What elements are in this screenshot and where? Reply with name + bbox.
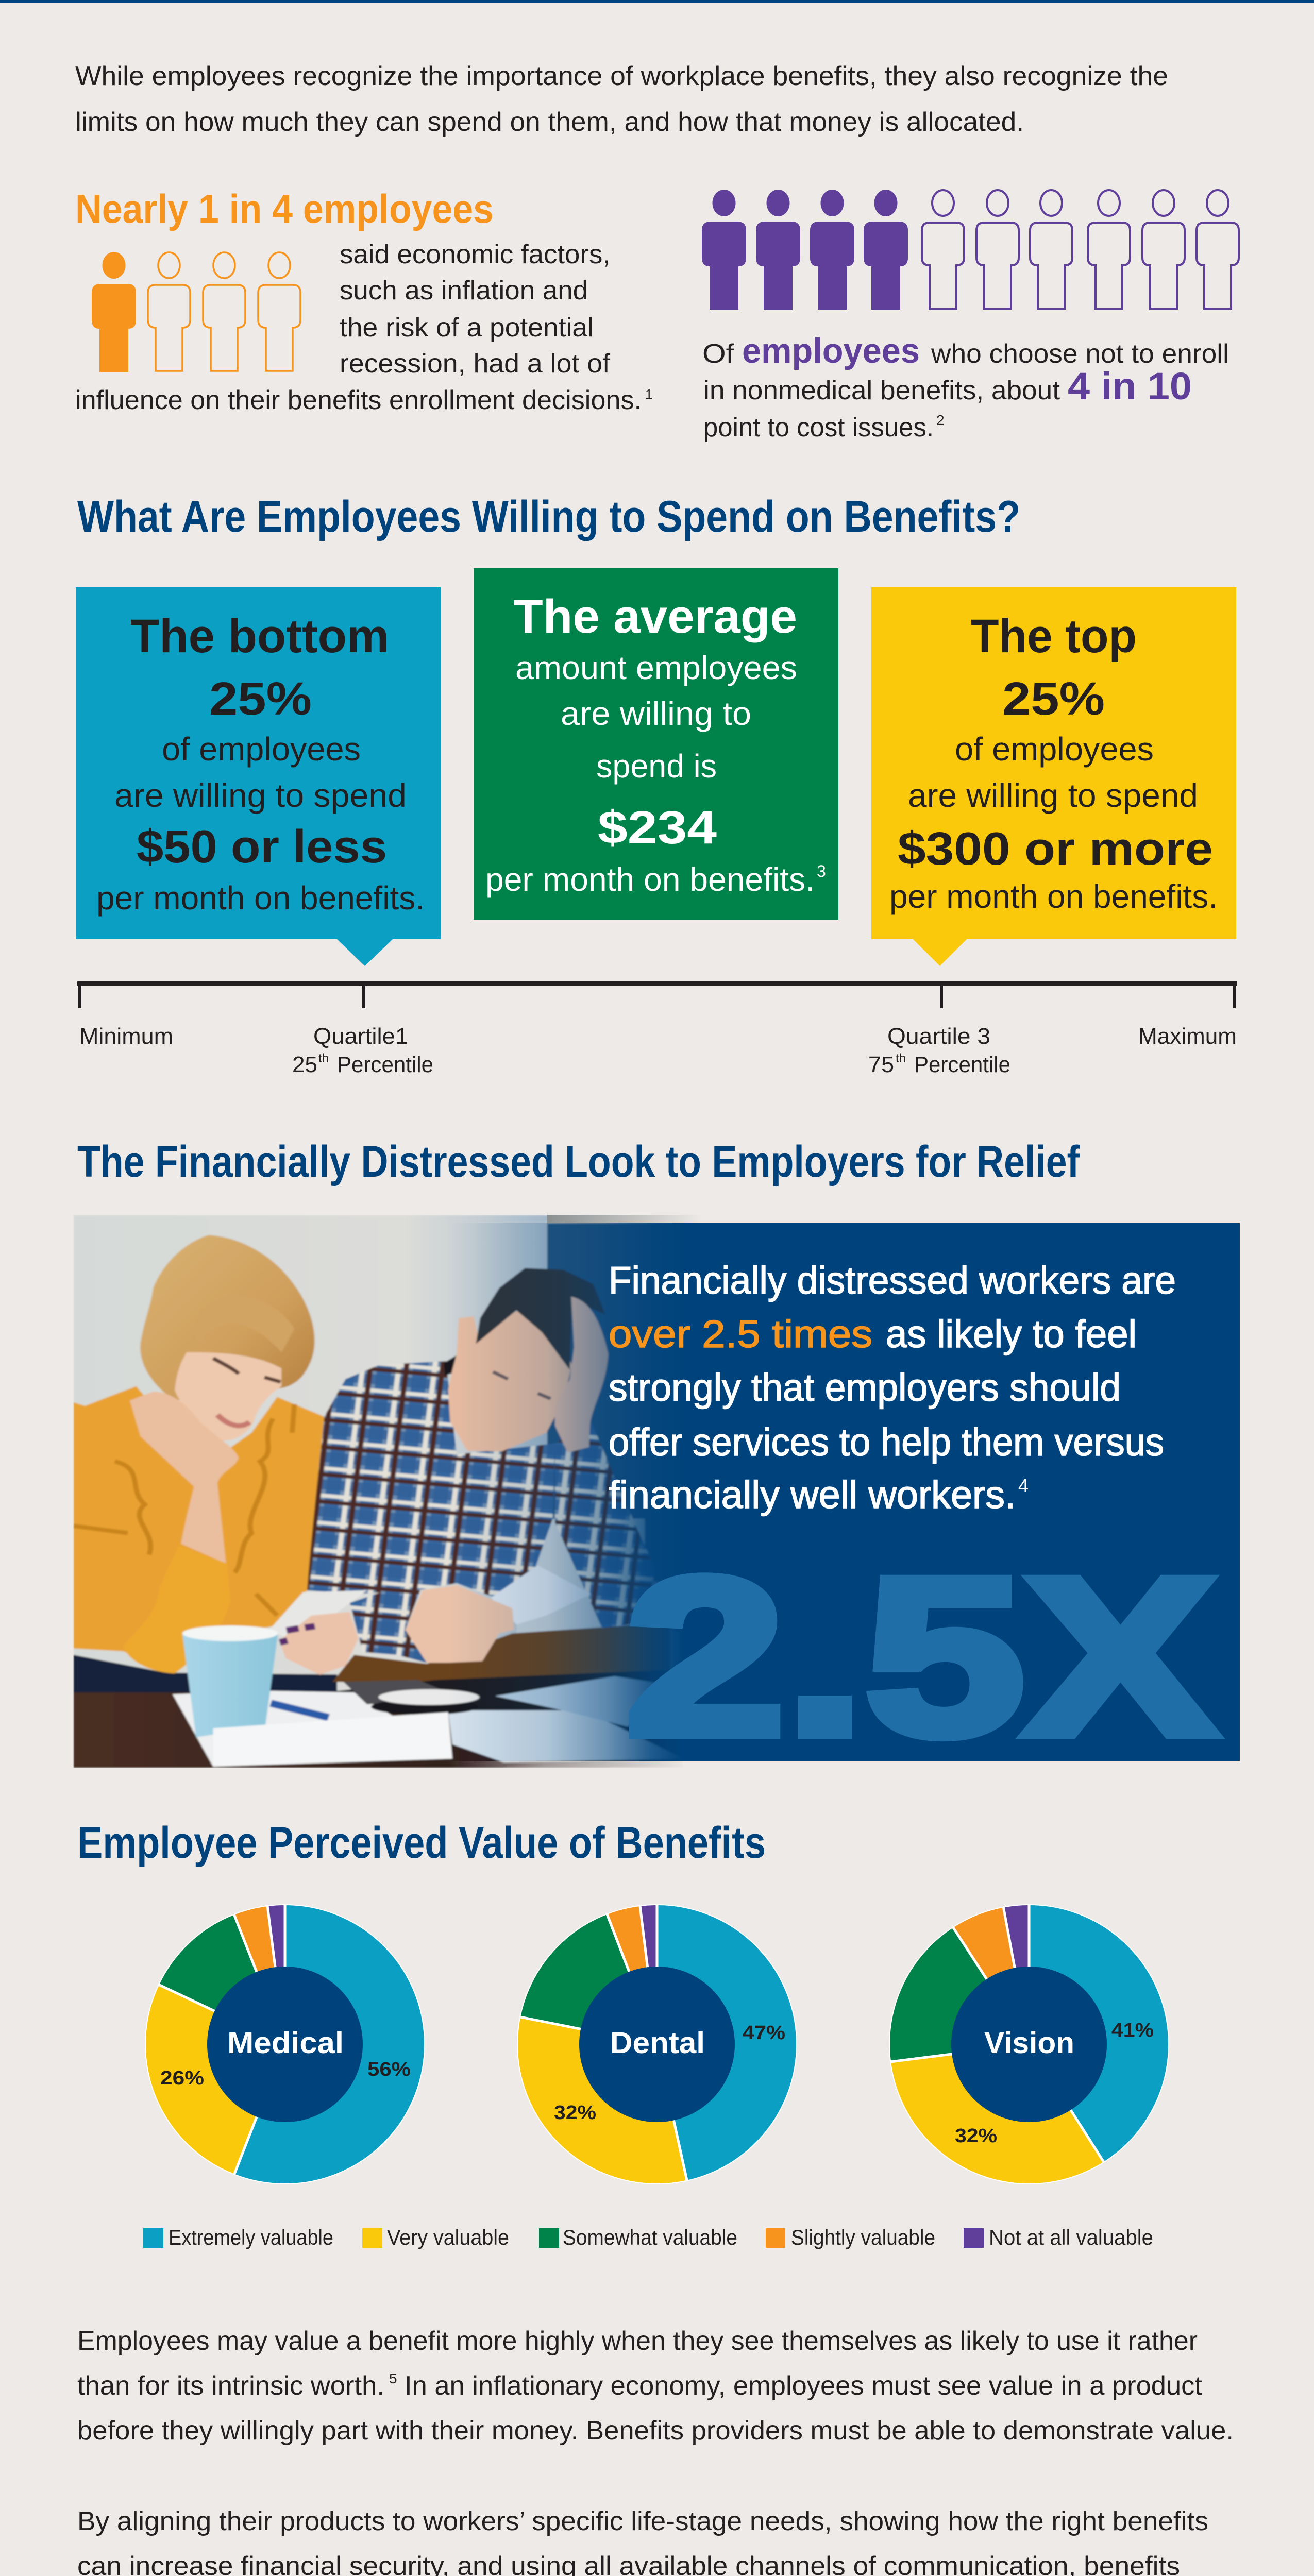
legend: Not at all valuable — [989, 2225, 1153, 2249]
heading: financially distressed: The Financially Distressed Look to Employers for Relief — [77, 1137, 1080, 1187]
intro text: limits on how much they can spend on them, and how that money is allocated. — [75, 107, 1024, 137]
text: financially distressed workers: strongly that employers should — [609, 1366, 1121, 1409]
callout: bottom 25%: of employees — [162, 731, 361, 768]
callout: average $234: $234 — [598, 802, 717, 854]
timeline axis with quartile labels: Minimum — [79, 1024, 173, 1049]
callout: top 25%: The top — [971, 610, 1137, 663]
panel: photo with stat — [73, 1215, 1240, 1782]
text: value paragraph: than for its intrinsic worth. — [77, 2371, 384, 2401]
text: economic factors: recession, had a lot of — [340, 349, 611, 379]
callout: top 25%: are willing to spend — [908, 777, 1198, 814]
legend: Extremely valuable — [169, 2225, 333, 2249]
text: closing paragraph: By aligning their products to workers’ specific life-stage needs, showing how the right benefits — [77, 2506, 1208, 2536]
timeline axis with quartile labels: Quartile1 — [313, 1024, 408, 1049]
callout: top 25%: of employees — [955, 731, 1154, 768]
chart: dental donut — [517, 1904, 797, 2184]
text: cost issues: in nonmedical benefits, about — [703, 376, 1060, 405]
legend: Slightly valuable — [791, 2225, 935, 2249]
timeline axis with quartile labels: Quartile 3 — [887, 1024, 990, 1049]
text: financially distressed workers: financially well workers. — [609, 1473, 1016, 1516]
icon: ten people, four filled — [702, 190, 1239, 310]
intro text — [75, 61, 1168, 137]
heading: nearly 1 in 4: Nearly 1 in 4 employees — [75, 186, 494, 231]
timeline axis with quartile labels: 25 — [292, 1052, 317, 1077]
callout: top 25%: per month on benefits. — [889, 878, 1218, 915]
heading: willing to spend: What Are Employees Willing to Spend on Benefits? — [77, 492, 1020, 541]
text: financially distressed workers: 4 — [1018, 1475, 1029, 1496]
text: cost issues: Of — [702, 339, 735, 369]
callout: top 25% — [871, 587, 1236, 966]
text: economic factors: said economic factors, — [340, 240, 610, 269]
legend: Somewhat valuable — [563, 2225, 737, 2249]
top bar — [0, 0, 1314, 3]
overlay: navy panel and gradient fades — [448, 1215, 1240, 1769]
stat: 2.5X watermark: 2.5X — [626, 1532, 1218, 1782]
text: economic factors — [75, 240, 652, 415]
text: cost issues: point to cost issues. — [703, 413, 934, 443]
text: financially distressed workers: offer services to help them versus — [609, 1420, 1164, 1464]
text: economic factors: such as inflation and — [340, 276, 588, 306]
timeline axis with quartile labels — [77, 982, 1237, 1077]
text: value paragraph — [77, 2326, 1234, 2446]
text: value paragraph: 5 — [389, 2370, 397, 2386]
chart: dental donut: Dental — [610, 2026, 705, 2060]
panel: 4 in 10 employees — [702, 190, 1239, 443]
text: economic factors: the risk of a potential — [340, 313, 594, 343]
callout: average $234: are willing to — [561, 695, 751, 732]
callout: average $234: The average — [513, 590, 797, 643]
chart: dental donut: 32% — [554, 2102, 596, 2124]
text: economic factors: 1 — [645, 386, 652, 402]
timeline axis with quartile labels: 75 — [868, 1052, 894, 1077]
callout: bottom 25% — [76, 587, 441, 966]
text: cost issues: who choose not to enroll — [931, 339, 1229, 369]
text: cost issues — [702, 331, 1229, 443]
text: value paragraph: In an inflationary economy, employees must see value in a product — [405, 2371, 1203, 2401]
intro text: While employees recognize the importance of workplace benefits, they also recognize the — [75, 61, 1168, 91]
callout: top 25%: 25% — [1002, 673, 1105, 725]
callout: average $234: 3 — [817, 862, 826, 880]
chart: medical donut — [145, 1904, 425, 2184]
callout: top 25%: $300 or more — [898, 823, 1213, 875]
callout: average $234: per month on benefits. — [485, 861, 815, 898]
text: financially distressed workers: Financially distressed workers are — [609, 1259, 1176, 1302]
chart: vision donut — [889, 1904, 1169, 2184]
text: financially distressed workers: as likely to feel — [886, 1312, 1137, 1355]
text: economic factors: influence on their benefits enrollment decisions. — [75, 385, 642, 415]
chart: dental donut: 47% — [743, 2022, 785, 2044]
chart: vision donut: 41% — [1111, 2020, 1154, 2041]
callout: bottom 25%: per month on benefits. — [96, 879, 425, 917]
timeline axis with quartile labels: Maximum — [1138, 1024, 1237, 1049]
chart: medical donut: 56% — [367, 2059, 411, 2080]
heading: perceived value: Employee Perceived Value of Benefits — [77, 1818, 766, 1868]
text: financially distressed workers: over 2.5 times — [609, 1312, 872, 1355]
text: cost issues: 4 in 10 — [1068, 365, 1192, 408]
callout: average $234 — [474, 568, 838, 920]
callout: average $234: amount employees — [515, 649, 797, 686]
timeline axis with quartile labels: Percentile — [914, 1052, 1010, 1077]
icon: four people, one filled — [92, 252, 300, 372]
legend: Very valuable — [387, 2225, 509, 2249]
text: value paragraph: before they willingly part with their money. Benefits providers must be able to demonstrate value. — [77, 2416, 1234, 2446]
panel: nearly 1 in 4 employees — [75, 186, 652, 415]
chart: medical donut: Medical — [227, 2026, 344, 2060]
callout: bottom 25%: are willing to spend — [114, 777, 407, 814]
text: value paragraph: Employees may value a benefit more highly when they see themselves as likely to use it rather — [77, 2326, 1198, 2356]
text: cost issues: 2 — [936, 412, 945, 428]
chart: vision donut: Vision — [984, 2026, 1074, 2060]
timeline axis with quartile labels: th — [896, 1052, 906, 1065]
timeline axis with quartile labels: th — [318, 1052, 329, 1065]
photo: couple reviewing bills — [73, 1215, 684, 1768]
callout: bottom 25%: $50 or less — [137, 821, 387, 873]
callout: bottom 25%: 25% — [209, 673, 312, 725]
chart: vision donut: 32% — [955, 2125, 997, 2147]
timeline axis with quartile labels: Percentile — [337, 1052, 433, 1077]
chart: medical donut: 26% — [160, 2067, 204, 2089]
text: financially distressed workers — [609, 1259, 1176, 1516]
text: closing paragraph — [77, 2506, 1208, 2576]
legend — [143, 2225, 1153, 2249]
text: cost issues: employees — [742, 331, 920, 370]
callout: bottom 25%: The bottom — [130, 610, 389, 663]
callout: average $234: spend is — [596, 748, 717, 785]
